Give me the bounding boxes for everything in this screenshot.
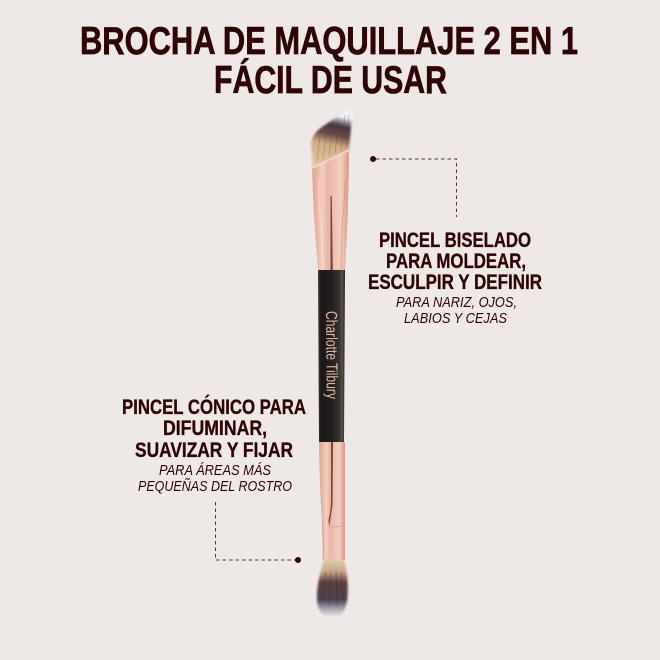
callout: angled brush: [368, 156, 542, 327]
callout heading: [122, 395, 306, 462]
tapered bristles: [317, 560, 348, 618]
callout heading: ESCULPIR Y DEFINIR: [368, 271, 542, 294]
logo text: Charlotte Tilbury: [322, 311, 340, 399]
title: FÁCIL DE USAR: [214, 58, 447, 102]
leader line: [370, 156, 456, 217]
callout heading: SUAVIZAR Y FIJAR: [135, 439, 293, 462]
callout heading: PINCEL CÓNICO PARA: [122, 395, 306, 419]
callout note: LABIOS Y CEJAS: [404, 310, 507, 327]
callout note: PARA ÁREAS MÁS: [159, 462, 271, 479]
callout note: [138, 462, 292, 495]
callout heading: PINCEL BISELADO: [379, 229, 531, 252]
black handle with logo: [318, 270, 345, 442]
callout note: PARA NARIZ, OJOS,: [396, 294, 517, 311]
callout heading: [368, 229, 542, 294]
callout heading: DIFUMINAR,: [163, 417, 267, 440]
callout heading: PARA MOLDEAR,: [386, 250, 526, 273]
angled bristles: [311, 110, 352, 170]
makeup brush: [311, 110, 352, 618]
upper ferrule: [312, 149, 349, 270]
lower ferrule: [319, 442, 345, 561]
callout: tapered brush: [122, 395, 306, 563]
leader line: [216, 502, 301, 563]
callout note: [396, 294, 517, 327]
callout note: PEQUEÑAS DEL ROSTRO: [138, 478, 292, 495]
title: [80, 20, 578, 102]
